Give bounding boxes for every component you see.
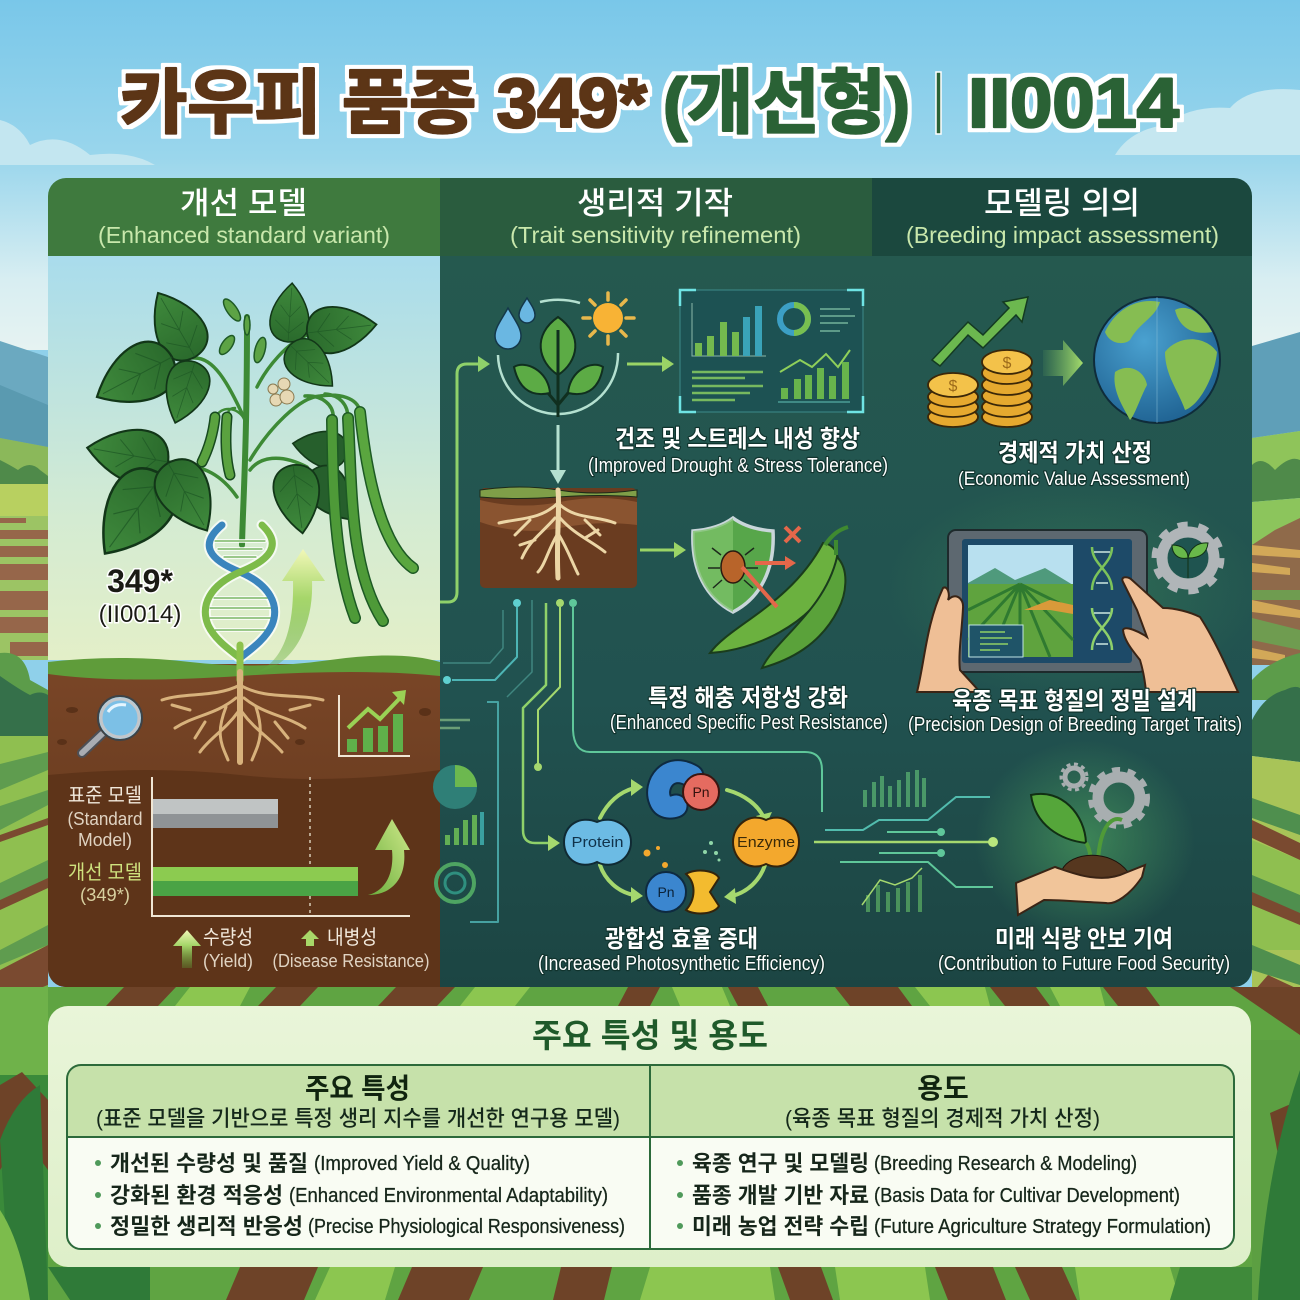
icon: rising arrow and coins: $ — [949, 378, 958, 395]
label: drought tolerance: 건조 및 스트레스 내성 향상 — [615, 426, 860, 453]
icon: rising arrow and coins: $ — [1003, 355, 1012, 372]
icon: plant with water and sun — [495, 293, 634, 417]
main panel — [48, 178, 1265, 987]
label: pest resistance — [610, 685, 888, 734]
bar: improved model — [153, 867, 358, 896]
icon: mini growth chart — [339, 690, 410, 756]
molecules — [644, 846, 668, 868]
label: 349*: (II0014) — [99, 601, 181, 628]
water drops — [495, 298, 535, 349]
icon: growth arrow — [268, 549, 325, 666]
header: 생리적 기작: 생리적 기작 — [577, 186, 733, 221]
circuit and mini charts: food security — [814, 770, 998, 912]
icon: analytics dashboard — [680, 290, 863, 412]
icon: globe — [1094, 297, 1220, 423]
column head: 용도 — [785, 1073, 1100, 1131]
bar chart: standard vs improved model — [68, 777, 410, 916]
screen: field photo — [968, 545, 1073, 657]
label: economic value: 경제적 가치 산정 — [998, 440, 1152, 467]
list: key traits: (Enhanced Environmental Adaptability) — [289, 1185, 608, 1207]
label: improved model — [68, 861, 142, 905]
label: food security: 미래 식량 안보 기여 — [995, 926, 1173, 953]
lower field strips — [0, 987, 1300, 1300]
protein blob — [564, 820, 631, 865]
header: 개선 모델: 개선 모델 — [180, 186, 307, 221]
icon: magnifier — [82, 696, 142, 753]
legend: disease resistance — [272, 926, 430, 971]
arrow: panel link to stress icon — [440, 356, 490, 602]
icon: small particles — [703, 841, 720, 862]
Pn complex top — [659, 772, 719, 810]
panel: key traits and uses — [48, 1006, 1251, 1267]
list: uses: 미래 농업 전략 수립 — [692, 1214, 869, 1239]
label: food security: (Contribution to Future Food Security) — [938, 953, 1230, 975]
label: pest resistance: 특정 해충 저항성 강화 — [648, 685, 848, 712]
right hand — [1122, 577, 1238, 692]
list: uses: (Future Agriculture Strategy Formulation) — [874, 1216, 1211, 1238]
legend: disease resistance: 내병성 — [327, 926, 377, 949]
label: improved model: (349*) — [80, 885, 130, 905]
column head: 용도: 용도 — [917, 1073, 969, 1104]
label: standard model: 표준 모델 — [68, 784, 142, 807]
header: 생리적 기작: (Trait sensitivity refinement) — [510, 222, 801, 248]
left hand — [917, 587, 980, 692]
list: uses: 육종 연구 및 모델링 — [692, 1151, 869, 1176]
column head: 주요 특성: (표준 모델을 기반으로 특정 생리 지수를 개선한 연구용 모델) — [96, 1106, 620, 1131]
icon: soil block with roots — [480, 487, 637, 588]
icon: rising arrow and coins — [928, 297, 1032, 427]
icon: hand holding seedling — [1016, 764, 1147, 915]
label: economic value: (Economic Value Assessment) — [958, 469, 1190, 490]
title: II0014 — [968, 64, 1179, 142]
legend: yield: 수량성 — [203, 926, 253, 949]
arrow: into protein cycle — [548, 835, 560, 851]
list: key traits: 개선된 수량성 및 품질 — [110, 1151, 308, 1176]
label: standard model: (Standard — [68, 809, 142, 829]
left side landscape — [0, 341, 48, 1076]
bar: standard model — [153, 799, 278, 828]
title: (개선형) — [663, 64, 910, 142]
label: precision design: (Precision Design of Breeding Target Traits) — [908, 714, 1242, 736]
left soil ground — [48, 655, 440, 987]
icon: DNA helix — [205, 525, 275, 680]
table — [67, 1065, 1234, 1249]
icon: pest shield and pods — [693, 518, 848, 668]
label: photosynthetic efficiency — [538, 926, 825, 975]
list: key traits — [95, 1151, 625, 1239]
label: precision design: 육종 목표 형질의 정밀 설계 — [952, 688, 1197, 715]
right side landscape — [1252, 332, 1300, 1010]
label: 349* — [99, 563, 181, 628]
Pn complex bottom: Pn — [657, 884, 675, 900]
header: 모델링 의의: 모델링 의의 — [984, 186, 1140, 221]
label: standard model — [68, 784, 142, 850]
icon: protein cycle — [564, 772, 799, 913]
list: uses: 품종 개발 기반 자료 — [692, 1183, 869, 1208]
circuit lines — [443, 599, 822, 922]
header: 개선 모델 — [48, 178, 440, 256]
arrow: down to roots — [550, 425, 566, 484]
arrow: improvement — [368, 819, 410, 895]
icon: cowpea plant — [79, 281, 413, 621]
label: 349*: 349* — [107, 563, 173, 599]
icon: gear with sprout — [1155, 525, 1221, 591]
arrow: to dashboard — [627, 356, 674, 372]
label: photosynthetic efficiency: (Increased Photosynthetic Efficiency) — [538, 953, 825, 975]
label: standard model: Model) — [78, 830, 132, 850]
header: 모델링 의의: (Breeding impact assessment) — [906, 222, 1219, 248]
legend: yield: (Yield) — [203, 951, 253, 971]
sun — [583, 293, 634, 344]
label: drought tolerance: (Improved Drought & Stress Tolerance) — [588, 455, 888, 477]
column head: 용도: (육종 목표 형질의 경제적 가치 산정) — [785, 1106, 1100, 1131]
seedling — [514, 317, 603, 417]
enzyme blob: Enzyme — [737, 834, 795, 851]
header: 생리적 기작 — [440, 178, 872, 256]
list: uses: (Breeding Research & Modeling) — [874, 1153, 1137, 1175]
legend: disease resistance: (Disease Resistance) — [272, 951, 430, 971]
list: key traits: (Improved Yield & Quality) — [314, 1153, 530, 1175]
label: food security — [938, 926, 1230, 975]
icon: tablet with hands — [917, 530, 1238, 692]
label: economic value — [958, 440, 1190, 490]
protein blob: Protein — [572, 834, 624, 851]
legend: yield — [173, 926, 253, 971]
arrow: value to globe — [1043, 340, 1083, 386]
list: uses — [677, 1151, 1211, 1239]
label: photosynthetic efficiency: 광합성 효율 증대 — [605, 926, 758, 953]
Pn complex top: Pn — [692, 784, 710, 800]
screen: DNA panels — [1092, 547, 1112, 650]
title: 카우피 품종 349* — [120, 64, 648, 142]
arrow: roots to pest shield — [640, 542, 686, 558]
label: precision design — [908, 688, 1242, 736]
header: 개선 모델: (Enhanced standard variant) — [98, 222, 390, 248]
side data panel — [433, 720, 484, 902]
column head: 주요 특성 — [96, 1073, 620, 1131]
list: key traits: (Precise Physiological Responsiveness) — [308, 1216, 625, 1238]
column head: 주요 특성: 주요 특성 — [305, 1073, 410, 1104]
title — [120, 64, 1179, 142]
label: drought tolerance — [588, 426, 888, 477]
icon: plant roots — [162, 672, 323, 762]
enzyme blob — [733, 818, 799, 867]
label: pest resistance: (Enhanced Specific Pest Resistance) — [610, 712, 888, 734]
list: uses: (Basis Data for Cultivar Development) — [874, 1185, 1180, 1207]
list: key traits: 정밀한 생리적 반응성 — [110, 1214, 303, 1239]
label: improved model: 개선 모델 — [68, 861, 142, 884]
header: 모델링 의의 — [872, 178, 1252, 256]
list: key traits: 강화된 환경 적응성 — [110, 1183, 283, 1208]
heading: 주요 특성 및 용도 — [532, 1017, 768, 1054]
Pn complex bottom — [646, 871, 719, 913]
